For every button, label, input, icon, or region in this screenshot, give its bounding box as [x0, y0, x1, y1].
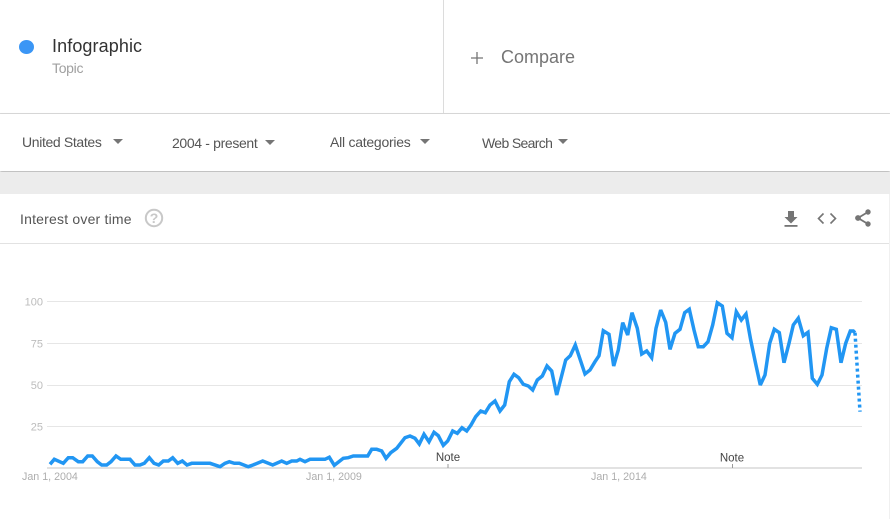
icon: search type caret: [558, 139, 568, 144]
x axis: [47, 467, 862, 469]
compare label: Compare: [501, 47, 575, 67]
y axis labels: 50: [31, 380, 43, 392]
x axis labels: Jan 1, 2014: [591, 471, 647, 483]
term name: Infographic: [52, 36, 142, 56]
panel: interest over time card: [0, 194, 889, 519]
icon: help: ?: [150, 210, 158, 226]
icon: plus: [471, 52, 483, 64]
term type: Topic: [52, 60, 83, 76]
panel: search term header: [0, 0, 890, 114]
note marker 2: Note: [720, 452, 744, 464]
y axis labels: 100: [25, 296, 43, 308]
card heading: Interest over time: [20, 211, 132, 227]
filter: region: United States: [22, 134, 102, 150]
icon: embed code: [818, 213, 836, 224]
icon: share: [855, 209, 871, 227]
icon: help: [144, 208, 164, 228]
chart grid lines: [47, 302, 862, 426]
page background band: [0, 172, 890, 194]
y axis labels: 25: [31, 422, 43, 434]
x axis labels: [22, 471, 647, 483]
filter: search type: Web Search: [482, 135, 552, 151]
x axis labels: Jan 1, 2004: [22, 471, 78, 483]
y axis labels: 75: [31, 338, 43, 350]
icon: download: [784, 211, 798, 227]
icon: time caret: [265, 140, 275, 145]
interest trend line: [50, 303, 855, 467]
icon: region caret: [113, 139, 123, 144]
filter: category: All categories: [330, 134, 411, 150]
icon: topic colour dot: [19, 40, 34, 54]
y axis labels: [25, 296, 43, 434]
right page edge: [889, 194, 890, 519]
x axis labels: Jan 1, 2009: [306, 471, 362, 483]
icon: category caret: [420, 139, 430, 144]
filter: time range: 2004 - present: [172, 135, 257, 151]
card header divider: [0, 243, 889, 244]
partial data dotted segment: [855, 333, 860, 412]
divider between term and compare: [443, 0, 444, 113]
panel: filter bar: [0, 114, 890, 171]
note marker 1: Note: [436, 452, 460, 464]
